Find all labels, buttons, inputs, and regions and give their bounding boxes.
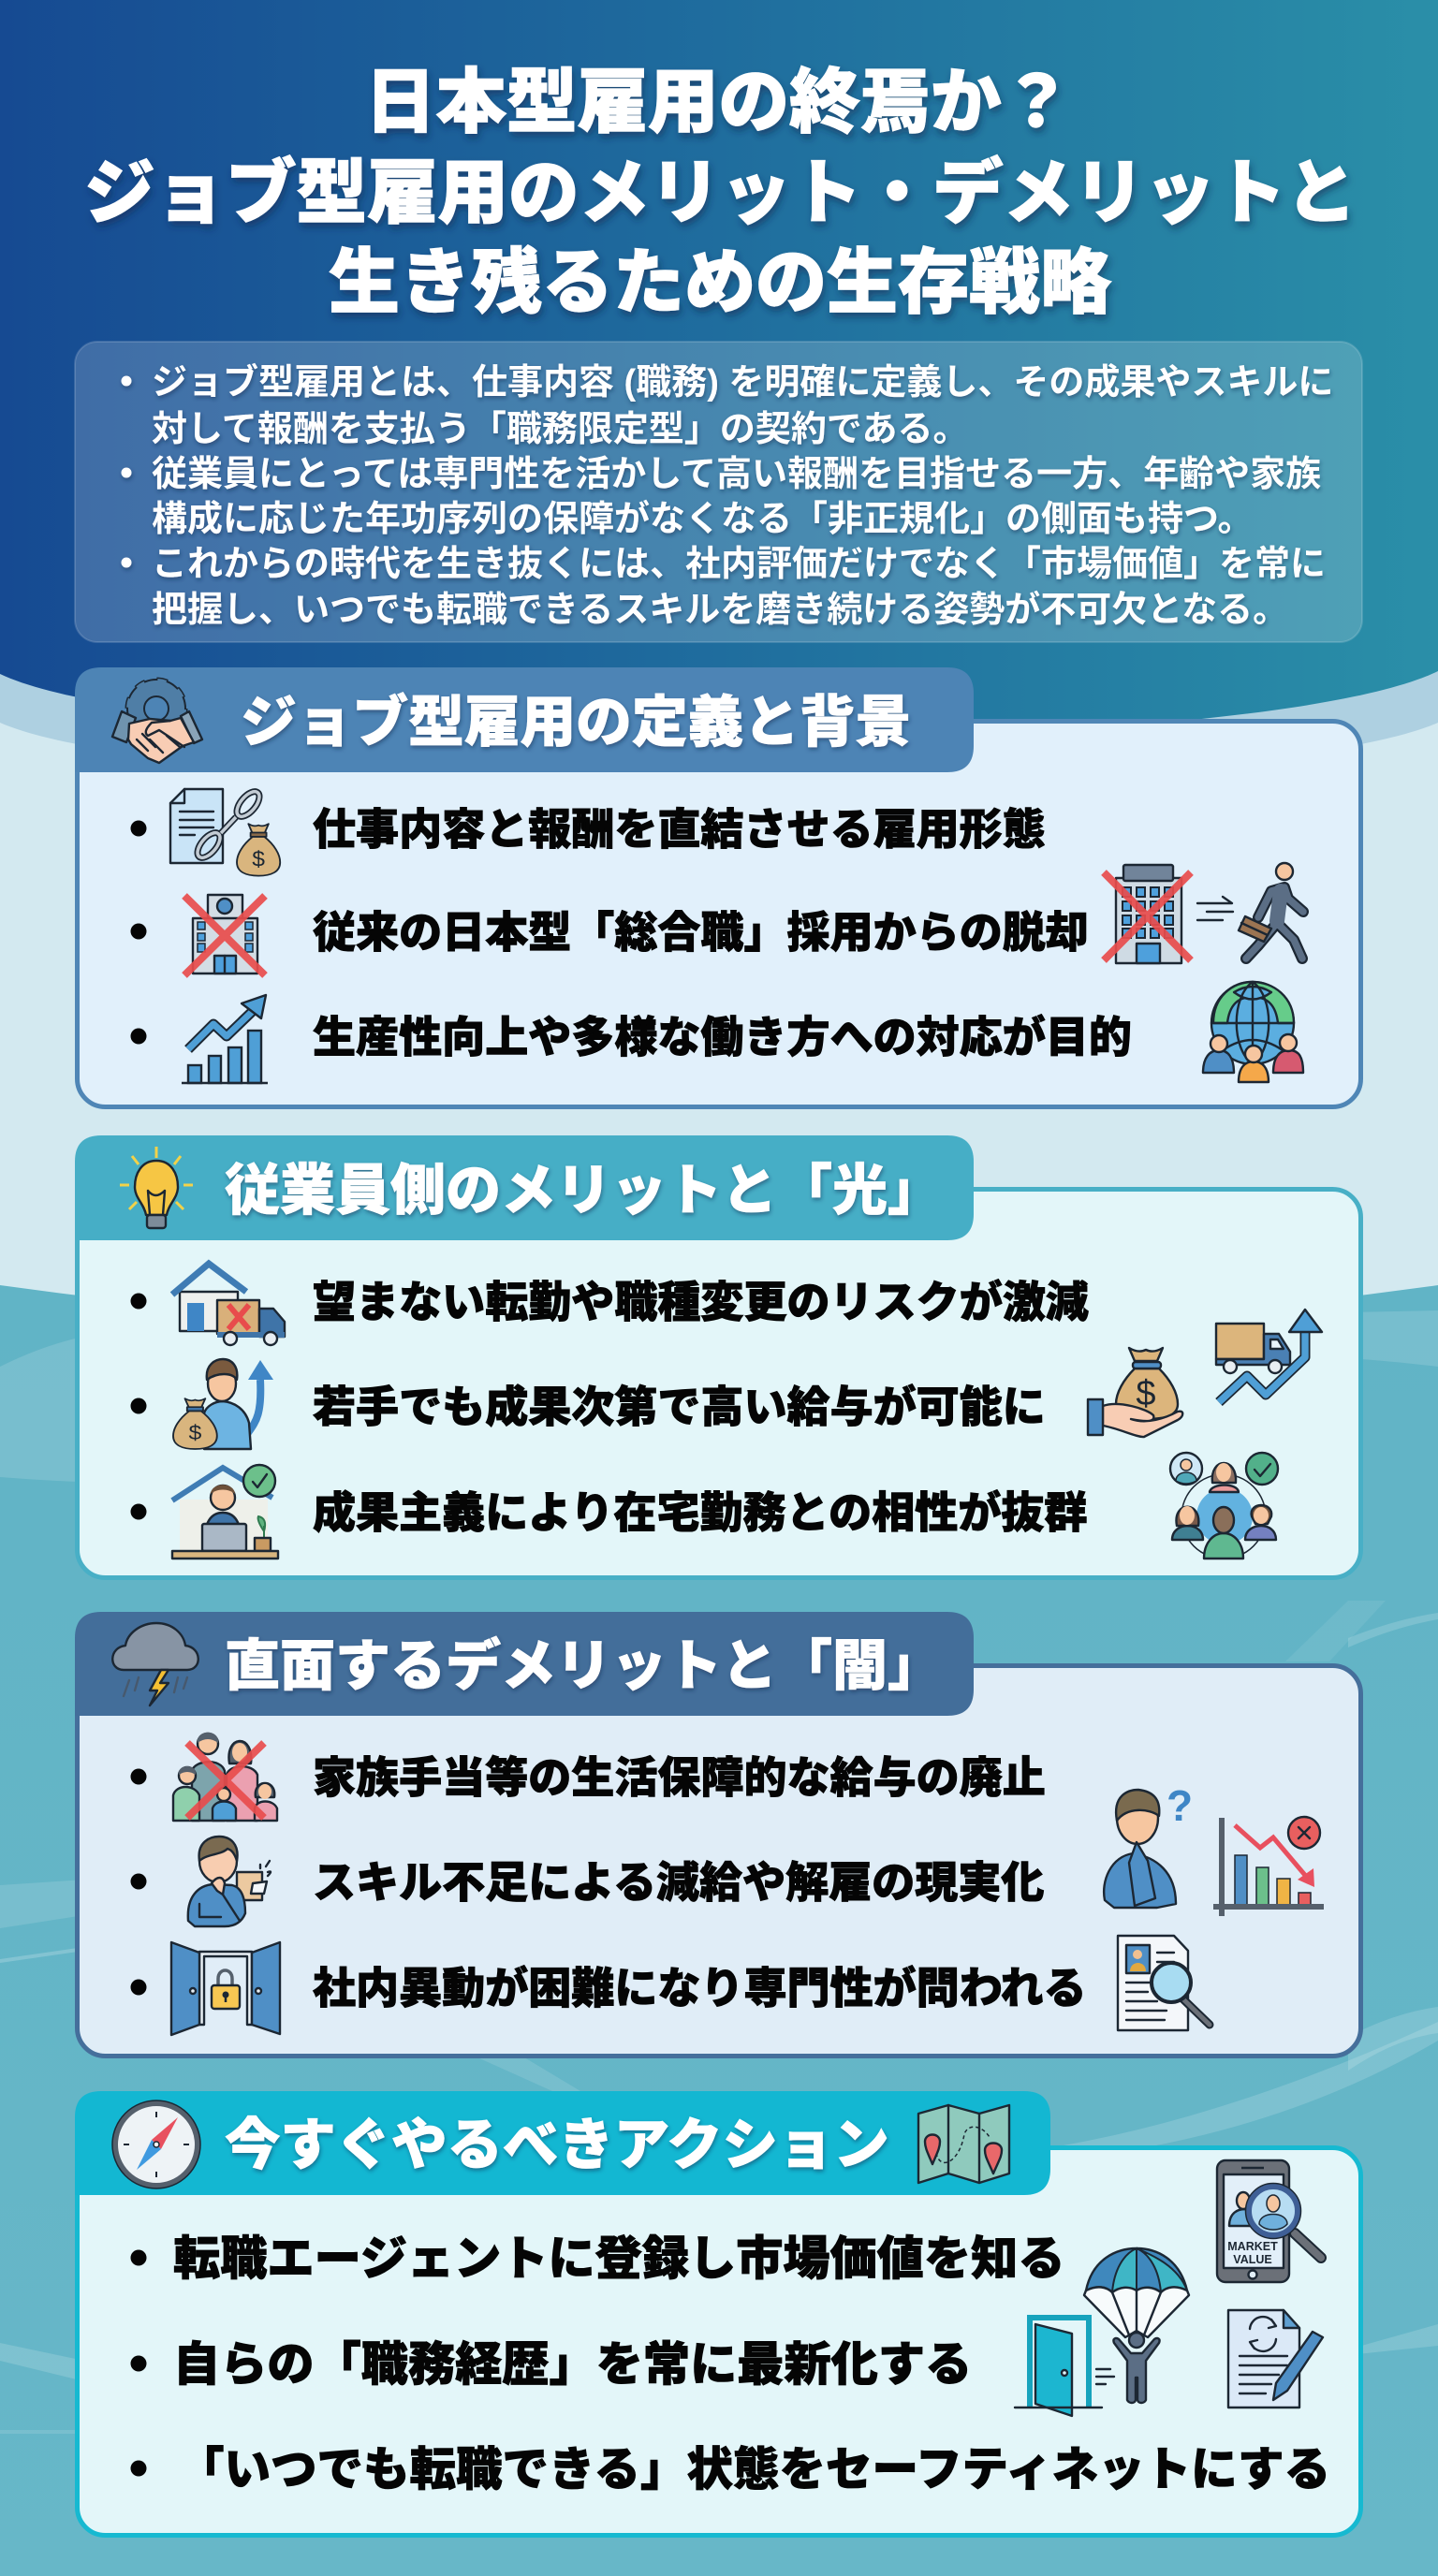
- icon: parachute: [1084, 2248, 1189, 2403]
- icon: locked doors: [171, 1942, 280, 2035]
- icon: folded map: [918, 2105, 1009, 2183]
- panel: summary: [75, 342, 1362, 642]
- item 3: [131, 982, 1303, 1083]
- icon: speed lines: [1197, 897, 1233, 920]
- item 2: [131, 863, 1303, 975]
- item 1: 仕事内容と報酬を直結させる雇用形態: [313, 805, 1046, 854]
- header tab: [75, 667, 974, 772]
- icon: resume and magnifier: [1118, 1936, 1210, 2030]
- summary text: [122, 362, 1333, 630]
- summary text: これからの時代を生き抜くには、社内評価だけでなく「市場価値」を常に: [152, 545, 1326, 584]
- item 1: 転職エージェントに登録し市場価値を知る: [173, 2232, 1065, 2285]
- panel: demerits: [75, 1612, 1361, 2056]
- icon: rising chart: [182, 995, 268, 1083]
- item 2: 従来の日本型「総合職」採用からの脱却: [313, 908, 1089, 957]
- summary text: 従業員にとっては専門性を活かして高い報酬を目指せる一方、年齢や家族: [152, 455, 1321, 494]
- panel: actions: [75, 2091, 1361, 2535]
- summary text: ジョブ型雇用とは、仕事内容 (職務) を明確に定義し、その成果やスキルに: [152, 362, 1333, 402]
- icon: document and pen: [1228, 2310, 1323, 2408]
- panel: definition and background: [75, 667, 1361, 1106]
- item 2: 若手でも成果次第で高い給与が可能に: [313, 1383, 1046, 1431]
- icon: market value phone: VALUE: [1233, 2253, 1272, 2266]
- icon: house and moving truck: [172, 1264, 285, 1345]
- title: 生き残るための生存戦略: [329, 243, 1111, 323]
- icon: contract, chain and money bag: [170, 788, 280, 876]
- heading: 今すぐやるべきアクション: [225, 2114, 889, 2176]
- item 3: 社内異動が困難になり専門性が問われる: [313, 1964, 1087, 2012]
- header tab: [75, 2091, 1050, 2195]
- icon: crossed-out family: [173, 1733, 277, 1821]
- icon: falling bar chart: [1213, 1817, 1324, 1916]
- item 1: [131, 2160, 1321, 2403]
- summary text: 対して報酬を支払う「職務限定型」の契約である。: [152, 410, 968, 449]
- icon: gear and handshake: [112, 681, 202, 763]
- icon: globe with people: [1203, 982, 1303, 1082]
- title: ジョブ型雇用のメリット・デメリットと: [84, 154, 1357, 232]
- icon: team circle: [1170, 1453, 1278, 1559]
- heading: 従業員側のメリットと「光」: [225, 1160, 943, 1222]
- item 1: 望まない転勤や職種変更のリスクが激減: [313, 1278, 1089, 1326]
- icon: open door: [1015, 2318, 1114, 2416]
- item 2: [131, 2310, 1323, 2416]
- icon: worried man with question mark: [1104, 1781, 1193, 1908]
- item 2: [131, 1781, 1324, 1926]
- icon: light bulb: [120, 1147, 193, 1228]
- title: 日本型雇用の終焉か？: [365, 63, 1072, 141]
- icon: hand holding money bag: [1088, 1348, 1182, 1437]
- header tab: [75, 1135, 974, 1240]
- panel: employee merits: [75, 1135, 1361, 1578]
- icon: truck and rising arrow: [1216, 1310, 1322, 1402]
- summary text: 把握し、いつでも転職できるスキルを磨き続ける姿勢が不可欠となる。: [152, 591, 1288, 630]
- heading: 直面するデメリットと「闇」: [225, 1635, 943, 1697]
- icon: hand holding money bag: $: [1136, 1374, 1156, 1413]
- icon: walking businessman: [1239, 863, 1303, 959]
- icon: worried man with question mark: ?: [1167, 1781, 1193, 1830]
- item 1: 家族手当等の生活保障的な給与の廃止: [313, 1753, 1046, 1802]
- item 3: 生産性向上や多様な働き方への対応が目的: [313, 1013, 1132, 1061]
- icon: worried man with paper: [188, 1837, 271, 1926]
- heading: ジョブ型雇用の定義と背景: [241, 691, 911, 754]
- item 2: スキル不足による減給や解雇の現実化: [313, 1858, 1044, 1907]
- icon: crossed-out office: [184, 895, 265, 975]
- item 2: 自らの「職務経歴」を常に最新化する: [173, 2338, 972, 2391]
- item 3: [131, 1936, 1210, 2035]
- item 3: 成果主義により在宅勤務との相性が抜群: [313, 1488, 1087, 1537]
- item 1: [131, 1733, 1046, 1821]
- summary text: 構成に応じた年功序列の保障がなくなる「非正規化」の側面も持つ。: [152, 500, 1253, 539]
- icon: storm cloud: [112, 1623, 198, 1705]
- item 3: 「いつでも転職できる」状態をセーフティネットにする: [178, 2444, 1330, 2496]
- icon: market value phone: [1217, 2160, 1321, 2282]
- icon: compass: [112, 2100, 200, 2188]
- item 3: [131, 1453, 1278, 1559]
- title: [84, 63, 1357, 323]
- icon: home office: [172, 1465, 278, 1559]
- icon: market value phone: MARKET: [1227, 2240, 1278, 2253]
- item 2: [131, 1348, 1182, 1449]
- icon: crossed-out building: [1104, 865, 1191, 963]
- header tab: [75, 1612, 974, 1716]
- item 1: [131, 1264, 1322, 1402]
- item 1: [131, 788, 1046, 876]
- icon: young man with bag and arrow: [173, 1359, 273, 1449]
